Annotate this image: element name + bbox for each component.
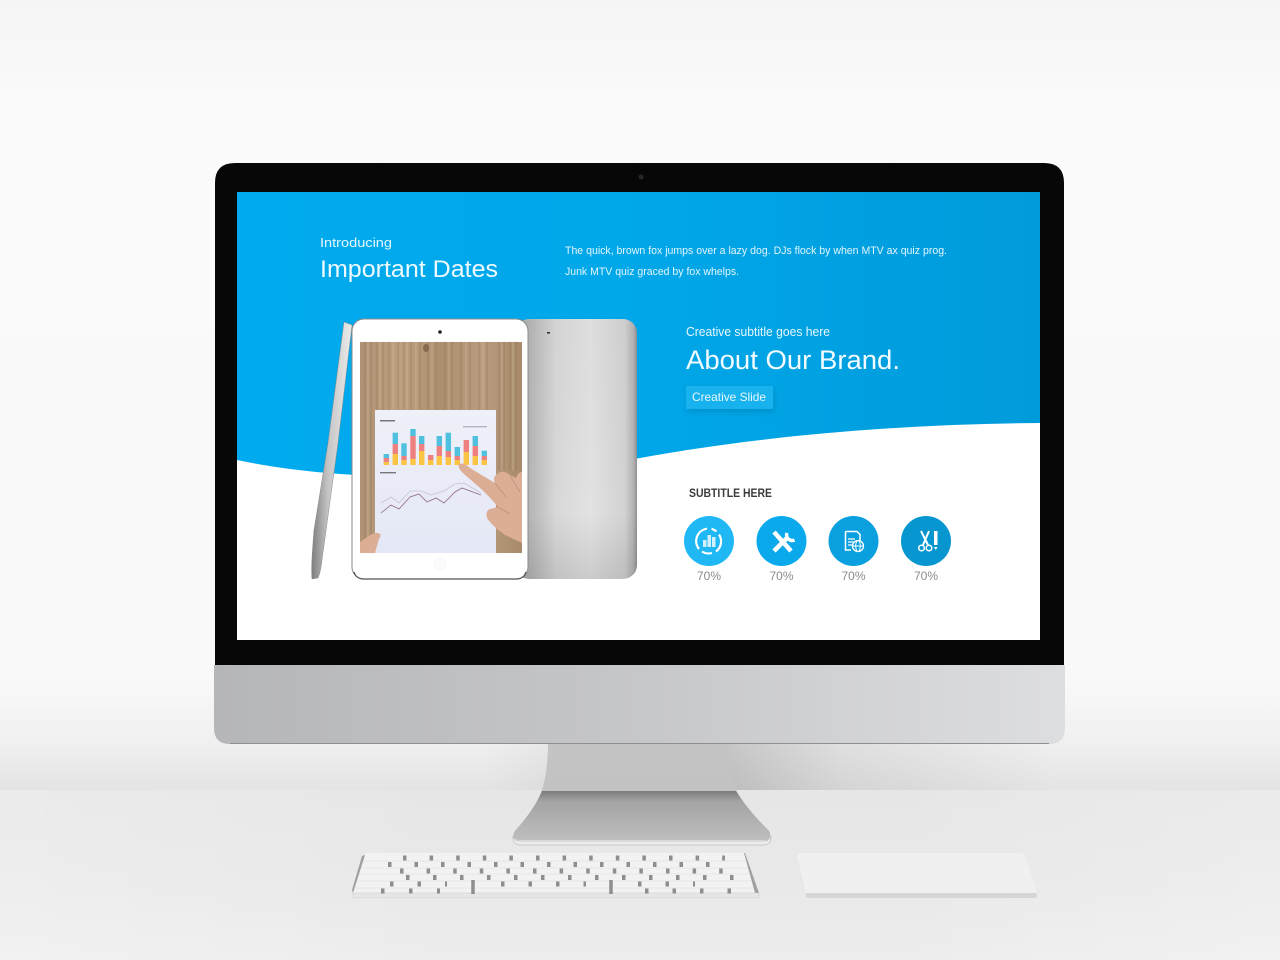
icon: tools 70%: 70%	[769, 569, 794, 583]
button: Creative Slide	[686, 386, 774, 412]
stacked bar chart	[384, 429, 487, 465]
trackpad	[797, 853, 1037, 898]
tablet side view	[312, 322, 352, 579]
paper with charts	[360, 410, 522, 553]
hand lower left	[360, 533, 381, 553]
heading: Important Dates: Important Dates	[320, 256, 498, 283]
home button	[434, 558, 446, 570]
background: desk	[0, 790, 1280, 960]
monitor chin	[214, 665, 1065, 744]
icon: scissors and pencil 70%: 70%	[914, 569, 938, 583]
paragraph: The quick, brown fox jumps over a lazy dog. DJs flock by when MTV ax quiz prog.	[565, 245, 947, 257]
monitor bezel	[215, 163, 1064, 665]
heading: SUBTITLE HERE: SUBTITLE HERE	[689, 488, 772, 500]
monitor stand	[513, 744, 771, 845]
tablet illustration	[312, 319, 637, 579]
monitor	[214, 163, 1065, 744]
tablet front view	[352, 319, 528, 579]
line chart	[380, 472, 481, 513]
icon: document with globe 70%: 70%	[841, 569, 866, 583]
hand pointing	[459, 464, 522, 543]
tablet back view	[515, 319, 637, 579]
icon: tools 70%	[756, 516, 806, 583]
keyboard	[352, 853, 759, 899]
icon: chart ring 70%	[684, 516, 734, 583]
stand shadow on wall	[480, 744, 1060, 790]
icon: document with globe 70%	[828, 516, 878, 583]
heading: Introducing: Introducing	[320, 235, 392, 250]
icon: chart ring 70%: 70%	[697, 569, 721, 583]
paragraph	[565, 245, 947, 278]
wooden surface photo	[360, 342, 522, 553]
paragraph: Junk MTV quiz graced by fox whelps.	[565, 266, 739, 278]
heading: About Our Brand: About Our Brand.	[686, 345, 900, 375]
screen	[237, 192, 1040, 640]
camera	[638, 174, 644, 180]
subtitle: Creative subtitle goes here: Creative subtitle goes here	[686, 325, 830, 339]
button: Creative Slide: Creative Slide	[692, 390, 766, 404]
icon: scissors and pencil 70%	[901, 516, 951, 583]
blue header with wave	[237, 192, 1040, 477]
